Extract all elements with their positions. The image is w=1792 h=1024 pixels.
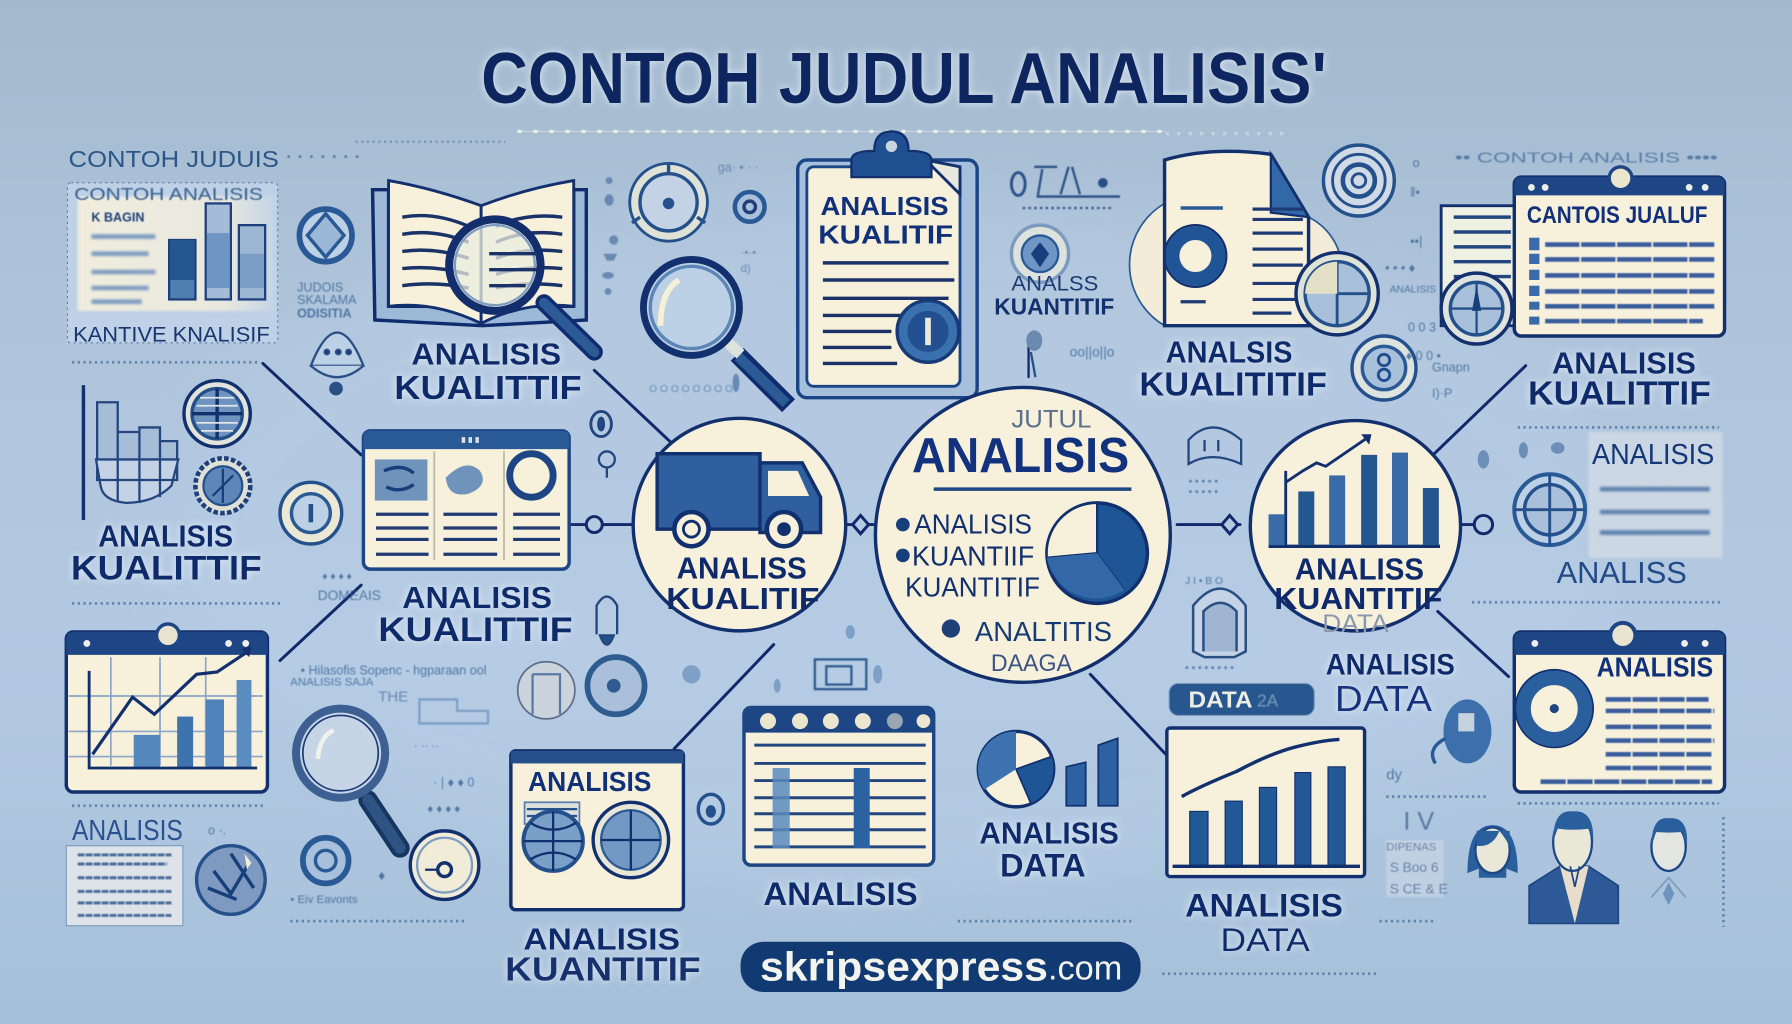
small note: left of label: DOMEAIS [318,588,381,603]
small marks near book: ·•·• [741,247,756,259]
footer pill: skripsexpress.com: skripsexpress [760,944,1048,990]
icon: concentric ring [1323,145,1394,216]
panel: lined window [744,707,934,865]
small marks near book: ga· • · · [718,160,759,174]
panel: clipboard analisis kualitatif: ANALISIS [821,191,949,221]
small marks right of doc: 0 0 3 [1408,320,1436,334]
small note: centre top: oo||o||o [1070,345,1115,360]
icon: woman [1467,825,1518,878]
icon: man centre [1529,811,1618,923]
panel: bottom left analisis sheet: ANALISIS [72,815,183,847]
circle: centre judul analisis: JUTUL [1011,405,1091,433]
icon: target left of book [299,209,352,262]
icon and label: analss kuantitif: KUANTITIF [994,293,1114,319]
circle: bar chart analiss kuantitif: DATA [1322,610,1389,638]
label: analsis kualititif doc: ANALSIS [1166,334,1293,369]
small marks right of doc: Gnapn [1432,360,1470,374]
small marks right of doc: I)·P [1432,387,1452,401]
small notes mid left: o ·. [208,823,226,837]
small note: scribbles top centre [1011,167,1120,208]
small note: left of label [318,571,381,603]
panel: faded analisis right: ANALISIS [1592,439,1714,471]
circle: centre judul analisis: ANALTITIS [975,616,1112,647]
icon: pin [1026,330,1042,377]
label: analsis kualititif doc [1139,334,1327,403]
icon: capsule [597,597,617,645]
small note: JUDOIS [297,280,343,294]
small notes mid left: • Hilasofis Sopenc - hgparaan ool [301,663,487,677]
panel: analisis kuantitatif card [511,751,683,910]
label: analisis kualitatif top right [1528,346,1711,413]
small notes lower right: S Boo 6 [1390,860,1439,875]
panel: left bottom chart window [66,624,267,792]
label: analisis data small [979,815,1119,884]
small notes mid left: · | ♦ ♦ 0 [433,775,474,789]
dotted rows [72,362,1723,974]
label: analisis kualitatif centre-left [378,580,573,649]
icon: small eye [735,192,765,222]
icon: man right [1651,818,1687,905]
label: analisis kualitatif book [394,337,582,407]
small notes lower right: DIPENAS [1386,841,1437,853]
small marks right of doc: ••| [1410,235,1422,249]
panel: top left summary: CONTOH ANALISIS [74,184,263,204]
small marks right of doc: ANALISIS [1390,285,1436,296]
chart: pie and bars [978,731,1118,807]
small notes mid left: THE [378,690,408,706]
panel: top left summary [67,146,279,347]
small note: top left dots: • • • • • • • [287,152,359,163]
small note: below helmet: • • • • • [1189,477,1218,488]
label: analisis data chart: DATA [1221,922,1310,958]
label: analisis bottom centre: ANALISIS [763,876,918,912]
icon: magnifier [643,259,789,406]
label: analiss right: ANALISS [1557,555,1687,590]
label: analisis data right [1326,648,1455,719]
panel: top right window [1441,167,1725,336]
small note: ODISITIA [297,307,352,321]
label: analisis data right: ANALISIS [1326,648,1455,681]
icon: gear [195,458,250,513]
panel: top left summary: K BAGIN [91,211,144,225]
icon: pin beside card [591,411,615,478]
tag: data: 2A [1257,690,1279,710]
small note: below helmet: J I • B O [1185,576,1223,587]
icon: compass [1441,273,1512,344]
small note: SKALAMA [297,293,357,307]
footer pill: skripsexpress.com [741,942,1141,992]
panel: three column card [363,431,569,569]
label: analisis data chart [1185,888,1343,958]
title divider dots [355,131,1291,142]
label: analisis kualitatif left: ANALISIS [98,518,233,553]
small notes mid left: • Eiv Eavonts [290,894,358,906]
small marks right of doc [1385,156,1470,401]
icon: helmet top right centre [1189,427,1241,464]
circle: truck analiss kualitif: KUALITIF [666,581,819,616]
small marks near frame [682,625,882,693]
small notes lower right: S CE & E [1390,882,1448,897]
label: analisis kualitatif left [71,518,262,587]
panel: top left summary: KANTIVE KNALISIF [73,322,270,347]
circle: bar chart analiss kuantitif [1250,421,1461,638]
circle: truck analiss kualitif [633,418,846,631]
connector lines [263,343,1526,754]
icon: small pin next to card [698,794,723,824]
icon: clock ring lower [410,831,479,899]
small marks near book [602,160,759,395]
label: analsis kualititif doc: KUALITITIF [1139,366,1327,403]
icon and label: analss kuantitif [994,225,1114,319]
group: people [1467,811,1687,923]
panel: faded analisis right [1589,432,1722,558]
small note: left of label: ♦ ♦ ♦ ♦ [322,571,352,582]
small pins near crosshair [1478,442,1565,469]
label: analisis kualitatif top right: ANALISIS [1552,346,1696,381]
icon: ring left middle [280,482,342,544]
icon: map circle [197,846,265,914]
small marks right of doc: ǁ• [1410,186,1420,200]
label: analisis kualitatif book: KUALITTIF [394,370,582,407]
small marks right of doc: o [1413,156,1420,170]
small note top right: •• CONTOH ANALISIS •••• [1455,150,1718,166]
label: analisis kuantitif bottom: ANALISIS [523,922,680,957]
small note: below helmet [1185,477,1234,674]
label: analisis kualitatif left: KUALITTIF [71,549,262,587]
small note: below helmet: • • • • • • • • [1185,663,1234,674]
panel: bottom left analisis sheet [66,815,183,926]
circle: bar chart analiss kuantitif: KUANTITIF [1274,581,1442,616]
panel: right bottom window: ANALISIS [1597,652,1713,683]
label: analisis data chart: ANALISIS [1185,888,1343,924]
icon: magnifier lower left [296,709,400,848]
panel: analisis kuantitatif card: ANALISIS [528,766,651,797]
chart: left bowl bars [83,385,178,520]
panel: right bottom window [1514,623,1725,792]
small note [297,280,357,321]
small notes lower right [1386,767,1448,897]
panel: document with donut [1130,151,1342,326]
icon: small ring lower [303,838,349,883]
label: analisis data right: DATA [1335,678,1433,719]
circle: centre judul analisis: DAAGA [991,650,1072,677]
icon: faint circles mid [518,657,645,719]
icon: crosshair ring [1514,474,1585,545]
panel: bar chart card [1167,728,1365,877]
circle: centre judul analisis: KUANTITIF [905,572,1040,603]
icon: globe [184,381,250,447]
icon: small frame above window [815,659,866,689]
small marks near book: d) [741,263,751,275]
tag: data: DATA [1189,686,1253,712]
icon: dome [311,333,363,394]
title: CONTOH JUDUL ANALISIS' [481,39,1327,119]
small notes lower right: dy [1386,767,1403,783]
circle: centre judul analisis: ANALISIS [914,509,1032,540]
circle: bar chart analiss kuantitif: ANALISS [1295,551,1424,586]
circle: centre judul analisis [875,387,1170,682]
small marks right of doc: • • • ♦ [1385,261,1415,275]
icon and label: analss kuantitif: ANALSS [1011,270,1098,295]
label: analisis kualitatif centre-left: KUALITTIF [378,611,573,649]
label: analisis kualitatif centre-left: ANALISIS [402,580,552,615]
small notes mid left: ♦ ♦ ♦ ♦ [427,804,460,816]
small notes mid left: · ·· ·· [414,741,439,753]
circle: truck analiss kualitif: ANALISS [677,550,807,585]
label: analisis data small: ANALISIS [979,815,1119,850]
icon: dial ring [630,163,707,241]
icon: seat [1193,589,1246,657]
small note: below helmet: • • • • • [1189,487,1218,498]
label: analisis kualitatif book: ANALISIS [411,337,561,372]
icon: headset blob [1433,699,1491,763]
small notes mid left [208,663,488,906]
label: analisis kuantitif bottom: KUANTITIF [505,952,701,989]
tag: data [1169,683,1314,715]
heading: contoh judul: CONTOH JUDUIS [69,146,279,172]
small marks right of doc: ♦ 0 0 • [1406,349,1441,363]
small notes mid left: ANALISIS SAJA [290,677,374,689]
icon: gauge [1296,253,1378,335]
circle: centre judul analisis: KUANTIIF [912,541,1034,572]
panel: top right window: CANTOIS JUALUF [1527,202,1707,229]
small notes mid left: ♦ [378,868,385,883]
footer pill: skripsexpress.com: .com [1048,949,1122,987]
label: analisis kuantitif bottom [505,922,701,989]
label: analisis kualitatif top right: KUALITTIF [1528,376,1711,413]
label: analisis data small: DATA [1000,848,1086,884]
small marks near book: O O O O O O O O [649,384,733,395]
panel: clipboard analisis kualitatif: KUALITIF [818,219,953,249]
icon: ring bottom [1352,336,1416,400]
circle: centre judul analisis: ANALISIS [912,429,1129,483]
panel: clipboard analisis kualitatif [798,131,977,398]
small notes lower right: I V [1403,808,1434,836]
icon: open book with magnifier [373,181,594,352]
